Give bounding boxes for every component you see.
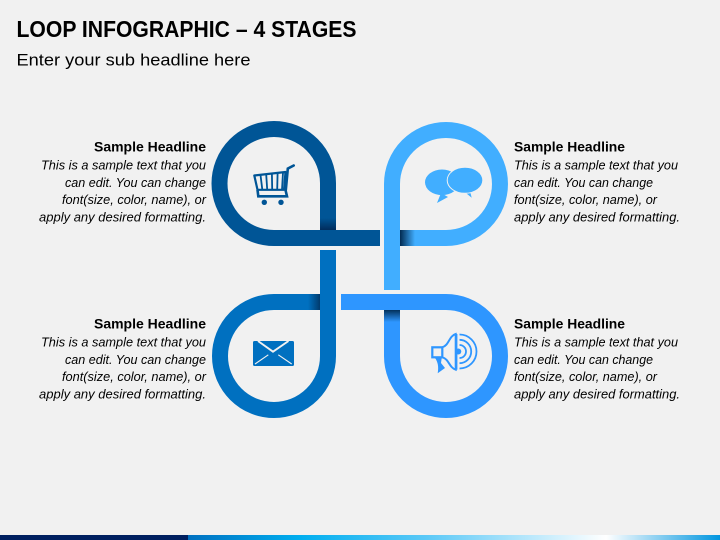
title: LOOP INFOGRAPHIC – 4 STAGES — [16, 16, 356, 42]
text block: bottom right: font(size, color, name), or — [514, 370, 658, 384]
text block: bottom left: font(size, color, name), or — [62, 370, 207, 384]
text block: top right: font(size, color, name), or — [514, 193, 658, 207]
icon: envelope — [253, 341, 294, 366]
loop: top right — [392, 130, 500, 290]
loop: bottom right — [341, 302, 500, 410]
icon: shopping cart — [254, 166, 294, 205]
text block: top right — [514, 139, 680, 224]
text block: top left: Sample Headline — [94, 139, 206, 155]
text block: bottom right: Sample Headline — [514, 316, 625, 332]
text block: top right: can edit. You can change — [514, 176, 653, 190]
text block: bottom left: Sample Headline — [94, 316, 206, 332]
text block: bottom right — [514, 316, 680, 402]
loop: top left — [219, 129, 380, 238]
text block: bottom left — [39, 316, 207, 402]
text block: top left — [39, 139, 207, 224]
text block: bottom left: apply any desired formatting. — [39, 388, 206, 402]
text block: bottom right: This is a sample text that you — [514, 336, 678, 350]
loop diagram — [219, 129, 500, 410]
icon: megaphone — [432, 334, 476, 373]
text block: bottom left: This is a sample text that you — [41, 336, 206, 350]
subtitle: Enter your sub headline here — [16, 50, 251, 70]
text block: top left: can edit. You can change — [65, 176, 206, 190]
text block: top right: This is a sample text that you — [514, 158, 678, 172]
text block: top left: font(size, color, name), or — [62, 193, 207, 207]
text block: top right: Sample Headline — [514, 139, 625, 155]
icon: speech bubbles — [425, 167, 483, 203]
text block: bottom right: can edit. You can change — [514, 353, 653, 367]
bottom colour bar — [0, 535, 720, 540]
text block: top left: This is a sample text that you — [41, 158, 206, 172]
text block: bottom left: can edit. You can change — [65, 353, 206, 367]
loop: bottom left — [220, 250, 328, 410]
text block: top left: apply any desired formatting. — [39, 210, 206, 224]
text block: bottom right: apply any desired formatting. — [514, 388, 680, 402]
text block: top right: apply any desired formatting. — [514, 210, 680, 224]
